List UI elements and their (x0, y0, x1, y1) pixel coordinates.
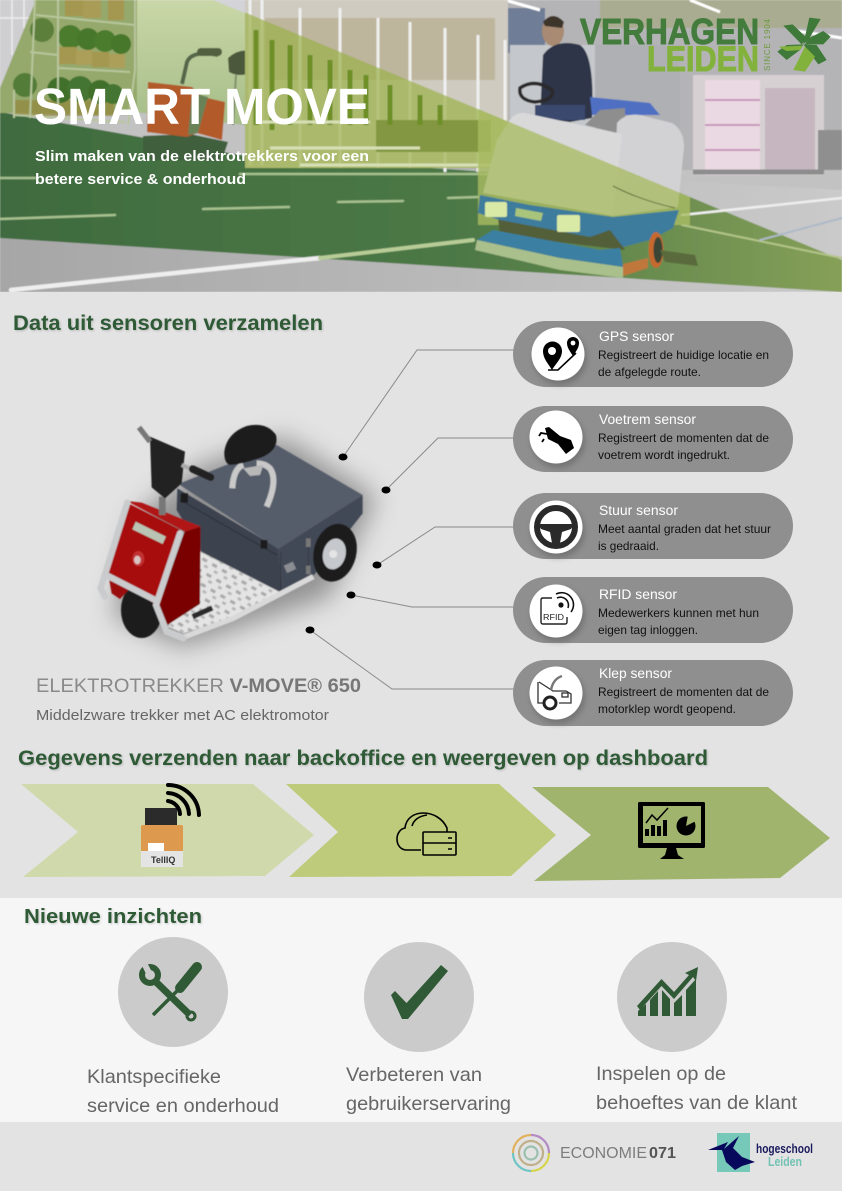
chevron 1: telematics device (21, 784, 314, 877)
panel: GPS sensor: de afgelegde route. (598, 365, 701, 379)
panel: Voetrem sensor: Voetrem sensor (599, 412, 697, 427)
silver frame (101, 503, 183, 638)
electric tug illustration (101, 425, 377, 647)
left plant shelves (0, 0, 137, 125)
icon: cloud and server (397, 813, 456, 855)
panel: Voetrem sensor: Registreert de momenten dat de (598, 431, 769, 445)
pots row 1 (65, 0, 83, 16)
steering column (152, 497, 172, 515)
panel: GPS sensor: GPS sensor (599, 329, 675, 344)
sensor dots (306, 454, 390, 634)
heading: nieuwe inzichten: Nieuwe inzichten (24, 906, 202, 928)
plate frame (168, 577, 313, 637)
logo: Verhagen Leiden: VERHAGEN (580, 11, 759, 52)
panel: RFID sensor (513, 577, 793, 643)
heading: gegevens verzenden: Gegevens verzenden naar backoffice en weergeven op dashboard (18, 746, 708, 770)
logo: Economie071 (513, 1135, 676, 1171)
logo: Hogeschool Leiden: Leiden (768, 1155, 802, 1169)
panel: Klep sensor: Registreert de momenten dat de (598, 685, 769, 699)
panel: RFID sensor: eigen tag inloggen. (598, 623, 698, 637)
logo: Verhagen Leiden: LEIDEN (647, 40, 759, 79)
icon: OBD tracker with wifi: TellIQ (151, 855, 175, 865)
front wheel (121, 582, 162, 638)
flower trolleys (245, 0, 508, 172)
left body (483, 113, 622, 216)
logo: Economie071: ECONOMIE (560, 1145, 647, 1162)
icon: foot on pedal (539, 427, 574, 454)
base (477, 230, 623, 267)
panel: Klep sensor (513, 660, 793, 726)
panel: Stuur sensor: Stuur sensor (599, 503, 679, 518)
chevron 3: dashboard monitor (532, 787, 830, 881)
panel: Stuur sensor: is gedraaid. (598, 539, 659, 553)
orange tug with pole (143, 48, 253, 160)
driver (520, 16, 592, 122)
red body side (157, 527, 201, 627)
icon: OBD tracker with wifi (141, 785, 199, 867)
red body front (106, 502, 182, 607)
insight text 3: Inspelen op de (596, 1063, 726, 1085)
rear wheel (307, 519, 363, 586)
icon: RFID tag (541, 593, 574, 624)
section: nieuwe inzichten background (0, 898, 842, 1122)
insight text 3: behoeftes van de klant (596, 1092, 798, 1114)
insight text 2 (346, 1064, 511, 1115)
logo: Verhagen Leiden (580, 11, 831, 79)
insight text 3 (596, 1063, 798, 1114)
insight text 2: gebruikerservaring (346, 1093, 511, 1115)
plants row 2 (58, 24, 81, 48)
subtitle: betere service & onderhoud (35, 171, 246, 188)
floor plate (168, 552, 283, 633)
icon: check mark (391, 965, 448, 1019)
insight text 1: service en onderhoud (87, 1095, 279, 1117)
panel: Klep sensor: motorklep wordt geopend. (598, 702, 736, 716)
box (177, 488, 283, 593)
heading: data uit sensoren: Data uit sensoren verzamelen (13, 312, 323, 335)
connector lines (310, 350, 520, 689)
insight 1: service (118, 937, 228, 1047)
icon: growth chart (637, 967, 698, 1016)
floor (0, 238, 483, 292)
panel: GPS sensor (513, 321, 793, 387)
panel: Stuur sensor: Meet aantal graden dat het stuur (598, 522, 771, 536)
panel: Voetrem sensor: voetrem wordt ingedrukt. (598, 448, 730, 462)
floor stripes (0, 174, 842, 290)
subtitle (35, 148, 369, 188)
logo: Hogeschool Leiden: hogeschool (756, 1142, 813, 1156)
photo backdrop (10, 112, 842, 190)
panel: Stuur sensor (513, 493, 793, 559)
wheel (623, 258, 648, 276)
header photo with green overlay (0, 0, 842, 292)
insight text 2: Verbeteren van (346, 1064, 482, 1086)
panel: RFID sensor: Medewerkers kunnen met hun (598, 606, 759, 620)
icon: steering wheel (537, 508, 575, 546)
panel: RFID sensor: RFID sensor (599, 587, 678, 602)
seat legs (232, 463, 273, 507)
seat (224, 425, 277, 465)
chevron 2: cloud server (286, 784, 556, 877)
insight 2: gebruikerservaring (364, 942, 474, 1052)
panel: Voetrem sensor (513, 406, 793, 472)
dark gap (498, 218, 625, 250)
icon: monitor with charts (638, 802, 705, 859)
subtitle: Slim maken van de elektrotrekkers voor een (35, 148, 369, 165)
right body (613, 115, 684, 216)
title: SMART MOVE (34, 78, 370, 135)
logo: Verhagen Leiden: SINCE 1904 (763, 18, 772, 71)
blue band (478, 195, 679, 247)
panel: GPS sensor: Registreert de huidige locatie en (598, 348, 769, 362)
wall (135, 0, 245, 125)
icon: car with open hood (538, 676, 571, 709)
product name: ELEKTROTREKKER V-MOVE® 650 (36, 675, 361, 697)
icon: map pins (543, 337, 579, 370)
logo star (777, 18, 831, 72)
lights (485, 202, 507, 217)
icon: wrench and screwdriver (142, 965, 197, 1020)
product description: Middelzware trekker met AC elektromotor (36, 708, 329, 724)
insight 3: behoeftes (617, 942, 727, 1052)
insight text 1: Klantspecifieke (87, 1066, 221, 1088)
blue bumper and console (590, 97, 660, 115)
panel: Klep sensor: Klep sensor (599, 666, 673, 681)
logo: Hogeschool Leiden (708, 1133, 813, 1172)
machine green tint (478, 100, 690, 225)
plants row 3 (14, 100, 114, 116)
icon: RFID tag: RFID (543, 613, 564, 622)
scrubber machine (475, 97, 698, 278)
right box trolley (693, 75, 842, 175)
tug shadow (113, 437, 377, 647)
logo: Economie071: 071 (649, 1145, 676, 1162)
insight text 1 (87, 1066, 279, 1117)
